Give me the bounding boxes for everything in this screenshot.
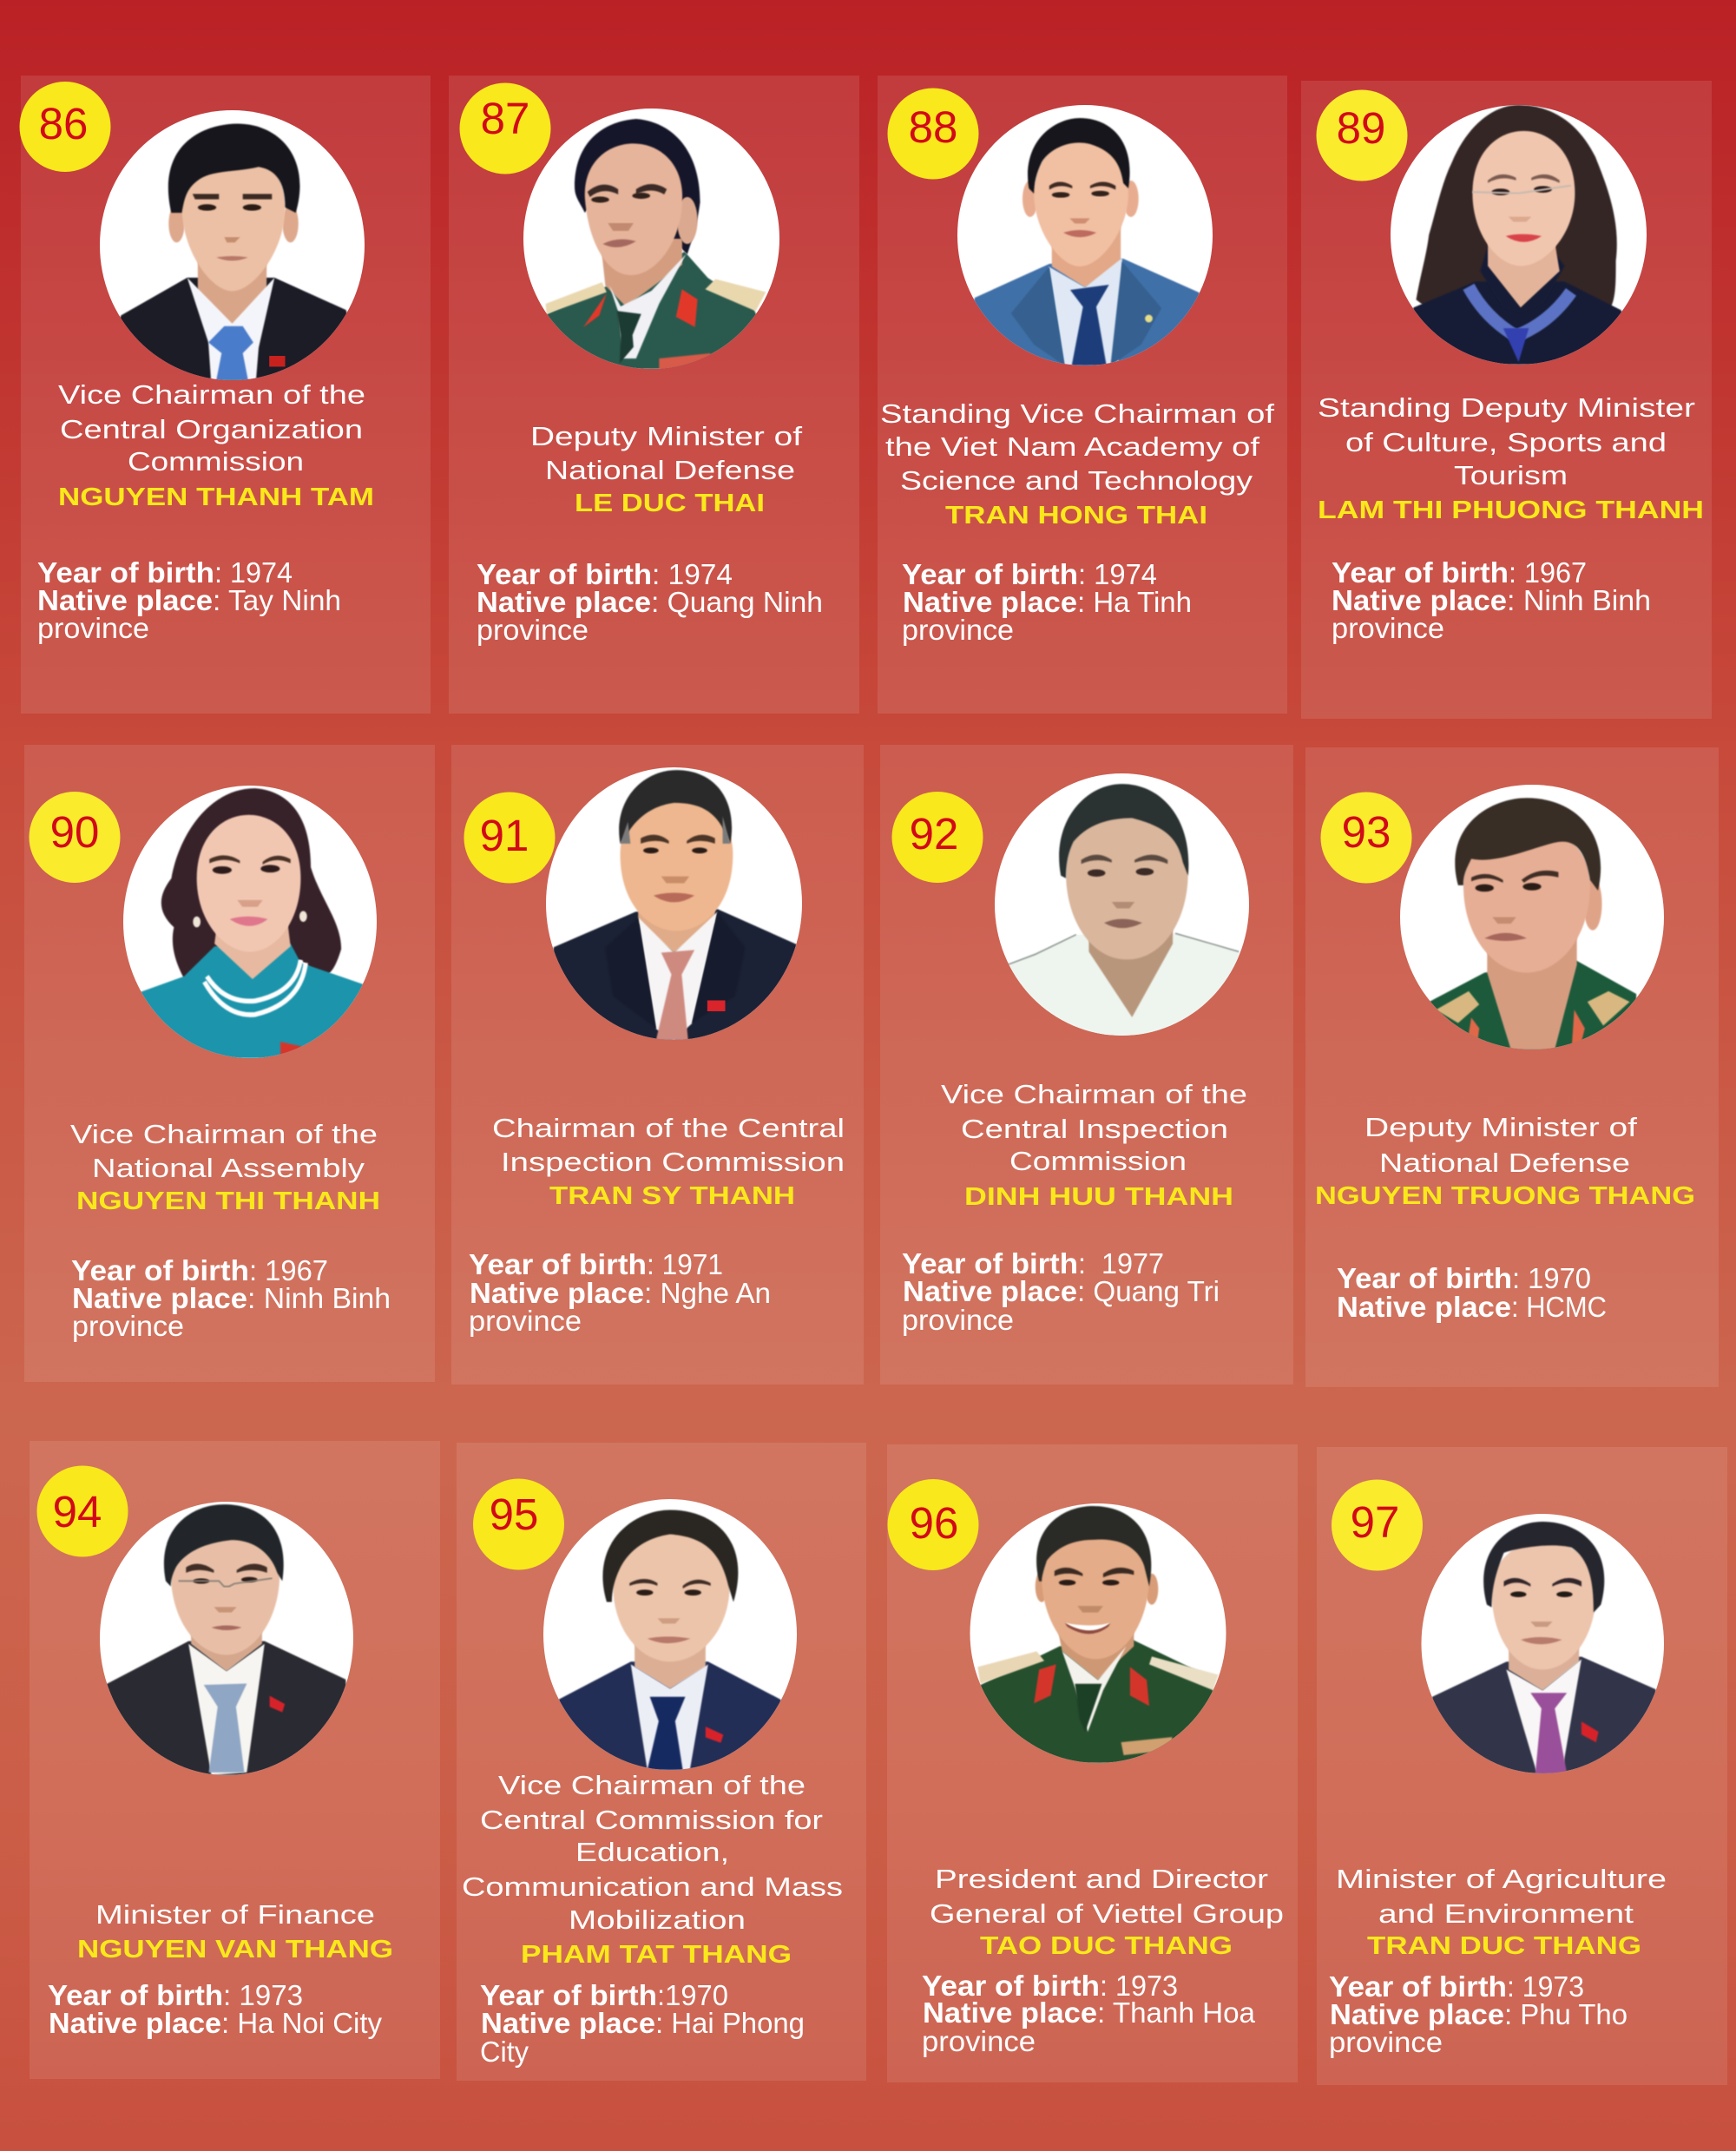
card 97	[1317, 1447, 1727, 2085]
badge 92: 92	[910, 809, 958, 858]
details 96	[922, 1970, 1256, 2057]
details 96: province	[922, 2025, 1036, 2057]
details 90	[71, 1254, 391, 1342]
details 97: Year of birth	[1329, 1970, 1507, 2003]
details 92: Native place	[903, 1275, 1077, 1307]
badge 96	[887, 1479, 979, 1570]
role 90	[70, 1120, 378, 1183]
details 93: : HCMC	[1511, 1291, 1607, 1323]
panel 88	[878, 76, 1287, 714]
details 95: :1970	[657, 1979, 728, 2011]
role 96	[930, 1865, 1284, 1929]
badge 91: 91	[480, 811, 529, 860]
role 95	[462, 1771, 843, 1935]
badge 93	[1321, 792, 1411, 884]
details 95: : Hai Phong	[655, 2007, 805, 2039]
role 89: of Culture, Sports and	[1345, 428, 1667, 457]
panel 90	[24, 745, 435, 1382]
badge 88: 88	[909, 102, 957, 152]
portrait 94	[100, 1502, 353, 1775]
portrait 87	[523, 109, 779, 369]
details 95: Native place	[481, 2007, 655, 2039]
role 96: General of Viettel Group	[930, 1899, 1284, 1929]
details 86: Year of birth	[37, 556, 214, 589]
details 92: : Quang Tri	[1077, 1275, 1220, 1307]
badge 90: 90	[50, 807, 99, 857]
role 95: Mobilization	[569, 1905, 746, 1935]
role 86: Commission	[128, 447, 304, 477]
details 87	[477, 558, 823, 646]
card 90	[24, 745, 435, 1382]
badge 95	[473, 1479, 564, 1569]
details 91: Native place	[470, 1277, 644, 1309]
name 93: NGUYEN TRUONG THANG	[1315, 1182, 1695, 1210]
name 86: NGUYEN THANH TAM	[58, 483, 374, 511]
name 89: LAM THI PHUONG THANH	[1318, 497, 1704, 524]
portrait 97	[1422, 1514, 1664, 1773]
role 86	[58, 380, 365, 477]
details 89	[1332, 556, 1651, 644]
card 87	[449, 76, 859, 714]
role 95: Education,	[575, 1838, 729, 1867]
details 90: : Ninh Binh	[247, 1282, 391, 1314]
details 96: Year of birth	[922, 1970, 1100, 2002]
details 91: Year of birth	[469, 1248, 647, 1280]
card 88	[878, 76, 1287, 714]
details 95: Year of birth	[480, 1979, 657, 2011]
details 94	[48, 1979, 382, 2039]
details 86: : 1974	[214, 556, 293, 589]
badge 96: 96	[910, 1498, 958, 1548]
details 89: Native place	[1332, 584, 1507, 616]
details 90: Year of birth	[71, 1254, 249, 1286]
role 93	[1364, 1113, 1638, 1178]
badge 86: 86	[39, 99, 88, 148]
details 88: : Ha Tinh	[1077, 586, 1192, 618]
details 94: : 1973	[223, 1979, 303, 2011]
panel 97	[1317, 1447, 1727, 2085]
role 88: Science and Technology	[900, 466, 1253, 496]
name 90: NGUYEN THI THANH	[76, 1187, 380, 1215]
role 93: Deputy Minister of	[1364, 1113, 1638, 1142]
badge 93: 93	[1342, 807, 1391, 857]
role 86: Central Organization	[60, 415, 363, 444]
details 91: : Nghe An	[644, 1277, 771, 1309]
details 88: Year of birth	[902, 558, 1078, 590]
details 89: : Ninh Binh	[1507, 584, 1651, 616]
details 87: : 1974	[652, 558, 733, 590]
portrait 89	[1391, 105, 1647, 365]
name 87: LE DUC THAI	[575, 490, 765, 517]
role 91	[492, 1114, 845, 1177]
details 89: province	[1332, 612, 1444, 644]
role 96: President and Director	[935, 1865, 1268, 1894]
role 95: Vice Chairman of the	[498, 1771, 806, 1800]
details 96: Native place	[923, 1996, 1097, 2029]
card 93	[1305, 747, 1719, 1387]
card 94	[30, 1441, 440, 2079]
details 90: Native place	[72, 1282, 247, 1314]
panel 93	[1305, 747, 1719, 1387]
details 97: province	[1329, 2026, 1443, 2058]
details 92: : 1977	[1078, 1247, 1164, 1279]
details 88	[902, 558, 1192, 646]
panel 87	[449, 76, 859, 714]
details 91: : 1971	[647, 1248, 723, 1280]
card 92	[880, 745, 1293, 1385]
details 87: Year of birth	[477, 558, 652, 590]
badge 86	[19, 82, 111, 172]
details 93: Native place	[1337, 1291, 1511, 1323]
details 94: : Ha Noi City	[221, 2007, 382, 2039]
role 97	[1336, 1865, 1667, 1929]
role 90: National Assembly	[92, 1154, 365, 1183]
details 97	[1329, 1970, 1628, 2058]
role 92	[941, 1080, 1247, 1176]
role 88: Standing Vice Chairman of	[880, 399, 1275, 429]
details 95	[480, 1979, 805, 2068]
role 90: Vice Chairman of the	[70, 1120, 378, 1149]
details 95: City	[480, 2036, 529, 2068]
role 88	[880, 399, 1275, 496]
card 86	[19, 76, 431, 714]
role 88: the Viet Nam Academy of	[885, 432, 1260, 462]
details 92: province	[902, 1304, 1014, 1336]
details 90: : 1967	[249, 1254, 328, 1286]
name 95: PHAM TAT THANG	[521, 1941, 792, 1969]
card 96	[887, 1444, 1298, 2082]
role 97: and Environment	[1378, 1899, 1634, 1929]
badge 89: 89	[1337, 103, 1385, 153]
panel 94	[30, 1441, 440, 2079]
badge 95: 95	[490, 1490, 538, 1539]
badge 91	[464, 792, 556, 884]
badge 97: 97	[1351, 1497, 1399, 1547]
badge 92	[892, 792, 983, 883]
details 92	[902, 1247, 1220, 1336]
details 91	[469, 1248, 771, 1337]
name 88: TRAN HONG THAI	[945, 502, 1207, 530]
card 91	[451, 745, 864, 1385]
details 88: : 1974	[1078, 558, 1157, 590]
details 91: province	[469, 1305, 582, 1337]
portrait 92	[995, 773, 1249, 1036]
portrait 95	[543, 1499, 797, 1770]
name 92: DINH HUU THANH	[964, 1183, 1233, 1211]
role 93: National Defense	[1379, 1148, 1630, 1178]
role 94: Minister of Finance	[95, 1900, 375, 1930]
details 97: : 1973	[1507, 1970, 1584, 2003]
role 97: Minister of Agriculture	[1336, 1865, 1667, 1894]
badge 97	[1332, 1479, 1423, 1571]
badge 89	[1316, 90, 1408, 181]
portrait 90	[123, 786, 377, 1058]
details 97: Native place	[1330, 1998, 1504, 2030]
portrait 91	[546, 767, 802, 1040]
role 95: Central Commission for	[480, 1806, 823, 1835]
card 95	[457, 1443, 866, 2081]
details 88: Native place	[903, 586, 1077, 618]
details 96: : 1973	[1100, 1970, 1178, 2002]
panel 95	[457, 1443, 866, 2081]
panel 89	[1301, 81, 1712, 719]
panel 96	[887, 1444, 1298, 2082]
role 91: Chairman of the Central	[492, 1114, 845, 1143]
panel 91	[451, 745, 864, 1385]
role 89: Tourism	[1454, 461, 1568, 490]
role 91: Inspection Commission	[501, 1148, 845, 1177]
role 87: Deputy Minister of	[530, 422, 803, 451]
details 88: province	[902, 614, 1014, 646]
role 89	[1318, 393, 1695, 490]
details 97: : Phu Tho	[1504, 1998, 1628, 2030]
details 89: Year of birth	[1332, 556, 1509, 589]
details 89: : 1967	[1509, 556, 1587, 589]
role 95: Communication and Mass	[462, 1872, 843, 1902]
portrait 96	[970, 1503, 1226, 1763]
details 86: province	[37, 612, 149, 644]
details 92: Year of birth	[902, 1247, 1078, 1279]
badge 94: 94	[53, 1487, 102, 1536]
badge 94	[36, 1465, 128, 1557]
role 92: Central Inspection	[961, 1115, 1228, 1144]
details 87: province	[477, 614, 589, 646]
badge 90	[30, 792, 120, 883]
badge 88	[887, 89, 979, 179]
name 96: TAO DUC THANG	[980, 1932, 1233, 1960]
details 86: : Tay Ninh	[213, 584, 341, 616]
role 87: National Defense	[545, 456, 795, 485]
badge 87: 87	[481, 94, 529, 143]
portrait 86	[100, 110, 365, 380]
name 94: NGUYEN VAN THANG	[77, 1936, 393, 1964]
role 86: Vice Chairman of the	[58, 380, 365, 410]
details 93	[1337, 1262, 1607, 1323]
panel 86	[21, 76, 431, 714]
details 90: province	[72, 1310, 184, 1342]
card 89	[1301, 81, 1712, 719]
details 94: Native place	[49, 2007, 221, 2039]
details 93: : 1970	[1512, 1262, 1591, 1294]
details 96: : Thanh Hoa	[1097, 1996, 1256, 2029]
portrait 93	[1400, 785, 1664, 1049]
details 94: Year of birth	[48, 1979, 223, 2011]
details 87: Native place	[477, 586, 651, 618]
details 87: : Quang Ninh	[651, 586, 823, 618]
badge 87	[460, 83, 550, 174]
role 92: Vice Chairman of the	[941, 1080, 1247, 1109]
panel 92	[880, 745, 1293, 1385]
name 91: TRAN SY THANH	[549, 1182, 795, 1210]
details 93: Year of birth	[1337, 1262, 1512, 1294]
details 86	[37, 556, 341, 644]
name 97: TRAN DUC THANG	[1367, 1932, 1641, 1960]
role 89: Standing Deputy Minister	[1318, 393, 1695, 423]
role 87	[530, 422, 803, 485]
portrait 88	[957, 105, 1213, 365]
details 86: Native place	[37, 584, 213, 616]
role 92: Commission	[1009, 1147, 1187, 1176]
